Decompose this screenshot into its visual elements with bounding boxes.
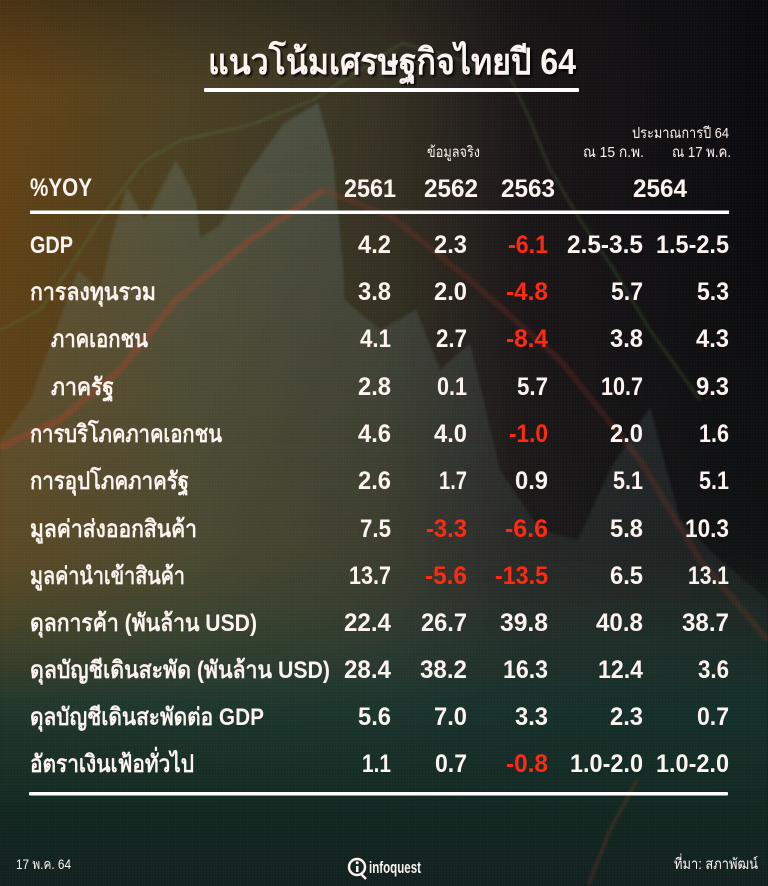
row: total investment: 3.8 — [358, 278, 391, 306]
row: private sector: 3.8 — [610, 325, 643, 353]
row: total investment: 2.0 — [434, 278, 467, 306]
table header: 2564 — [633, 175, 687, 203]
row: current account to GDP: 7.0 — [434, 703, 467, 731]
row: public spending: 5.1 — [613, 467, 643, 495]
row: public spending — [30, 466, 729, 497]
row: private consumption: 4.0 — [434, 420, 467, 448]
infoquest logo — [349, 858, 421, 879]
table header: 2563 — [501, 175, 555, 203]
row: imports: 6.5 — [610, 562, 643, 590]
row: private consumption: 4.6 — [358, 420, 391, 448]
row: inflation: 1.1 — [362, 750, 391, 778]
row: current account: 38.2 — [420, 656, 467, 684]
row: trade balance — [30, 609, 729, 639]
actual data caption: ข้อมูลจริง — [427, 144, 480, 161]
row: exports: มูลค่าส่งออกสินค้า — [30, 516, 197, 544]
forecast column caption: ประมาณการปี 64 — [632, 125, 729, 142]
row: private consumption: 1.6 — [699, 420, 729, 448]
row: total investment: -4.8 — [506, 278, 548, 306]
row: exports: 5.8 — [610, 515, 643, 543]
row: public sector: 5.7 — [517, 373, 548, 401]
row: imports: 13.1 — [688, 562, 729, 590]
row: imports — [30, 562, 729, 591]
row: public spending: 2.6 — [358, 467, 391, 495]
title: แนวโน้มเศรษฐกิจไทยปี 64 — [208, 40, 576, 85]
row: GDP: 4.2 — [358, 231, 391, 259]
forecast date 15 Feb: ณ 15 ก.พ. — [583, 144, 644, 161]
row: GDP — [30, 231, 729, 259]
row: inflation: 0.7 — [435, 750, 467, 778]
row: public spending: 1.7 — [439, 467, 467, 495]
row: public spending: การอุปโภคภาครัฐ — [30, 466, 189, 497]
row: private consumption: 2.0 — [610, 420, 643, 448]
row: private consumption: -1.0 — [509, 420, 548, 448]
row: current account to GDP — [30, 703, 729, 733]
row: exports: -6.6 — [505, 515, 548, 543]
row: imports: -5.6 — [425, 562, 467, 590]
row: total investment: การลงทุนรวม — [30, 279, 156, 308]
row: current account to GDP: 5.6 — [358, 703, 391, 731]
row: private sector: 4.1 — [360, 325, 391, 353]
row: exports: -3.3 — [426, 515, 467, 543]
table header: %YOY — [30, 174, 92, 202]
row: total investment: 5.7 — [611, 278, 643, 306]
row: total investment: 5.3 — [697, 278, 729, 306]
row: public sector: 0.1 — [437, 373, 467, 401]
row: public sector: 2.8 — [358, 373, 391, 401]
table header — [30, 174, 687, 203]
row: trade balance: 26.7 — [421, 609, 467, 637]
row: exports: 10.3 — [685, 515, 729, 543]
row: private sector — [51, 325, 729, 353]
row: GDP: 2.3 — [434, 231, 467, 259]
row: trade balance: 40.8 — [596, 609, 643, 637]
row: private consumption — [30, 419, 729, 448]
title underline — [204, 88, 579, 92]
date: 17 พ.ค. 64 — [16, 856, 71, 872]
forecast date 17 May: ณ 17 พ.ค. — [672, 144, 731, 161]
row: exports — [30, 515, 729, 544]
row: current account to GDP: 2.3 — [610, 703, 643, 731]
row: trade balance: 22.4 — [344, 609, 391, 637]
row: total investment — [30, 278, 729, 308]
row: GDP: 2.5-3.5 — [567, 231, 643, 259]
row: current account to GDP: 0.7 — [697, 703, 729, 731]
row: imports: 13.7 — [349, 562, 391, 590]
row: current account: ดุลบัญชีเดินสะพัด (พันล้าน USD) — [30, 657, 330, 686]
row: GDP: 1.5-2.5 — [656, 231, 729, 259]
table header: 2562 — [424, 175, 478, 203]
row: current account: 28.4 — [344, 656, 391, 684]
row: public spending: 5.1 — [699, 467, 729, 495]
row: GDP: -6.1 — [508, 231, 548, 259]
row: current account to GDP: ดุลบัญชีเดินสะพัดต่อ GDP — [30, 704, 264, 733]
row: trade balance: 38.7 — [682, 609, 729, 637]
row: inflation: 1.0-2.0 — [570, 750, 643, 778]
row: trade balance: 39.8 — [500, 609, 548, 637]
row: imports: มูลค่านำเข้าสินค้า — [30, 563, 185, 591]
row: current account: 16.3 — [503, 656, 548, 684]
row: imports: -13.5 — [495, 562, 548, 590]
header rule — [30, 210, 729, 214]
row: current account — [30, 656, 729, 686]
row: GDP: GDP — [30, 232, 73, 259]
row: inflation: อัตราเงินเฟ้อทั่วไป — [30, 746, 194, 778]
infoquest logo: infoquest — [369, 858, 421, 877]
bottom rule — [29, 792, 728, 796]
row: private sector: ภาคเอกชน — [51, 326, 148, 353]
row: public sector: ภาครัฐ — [51, 374, 114, 403]
row: public spending: 0.9 — [515, 467, 548, 495]
row: public sector — [51, 373, 729, 403]
row: current account to GDP: 3.3 — [515, 703, 548, 731]
row: trade balance: ดุลการค้า (พันล้าน USD) — [30, 610, 257, 639]
row: inflation: -0.8 — [506, 750, 548, 778]
row: current account: 12.4 — [598, 656, 643, 684]
row: private consumption: การบริโภคภาคเอกชน — [30, 419, 222, 448]
row: exports: 7.5 — [360, 515, 391, 543]
row: public sector: 10.7 — [601, 373, 643, 401]
row: inflation — [30, 746, 729, 778]
row: inflation: 1.0-2.0 — [656, 750, 729, 778]
row: private sector: 4.3 — [696, 325, 729, 353]
row: current account: 3.6 — [698, 656, 729, 684]
row: private sector: 2.7 — [436, 325, 467, 353]
table header: 2561 — [344, 175, 396, 203]
row: private sector: -8.4 — [506, 325, 548, 353]
row: public sector: 9.3 — [696, 373, 729, 401]
